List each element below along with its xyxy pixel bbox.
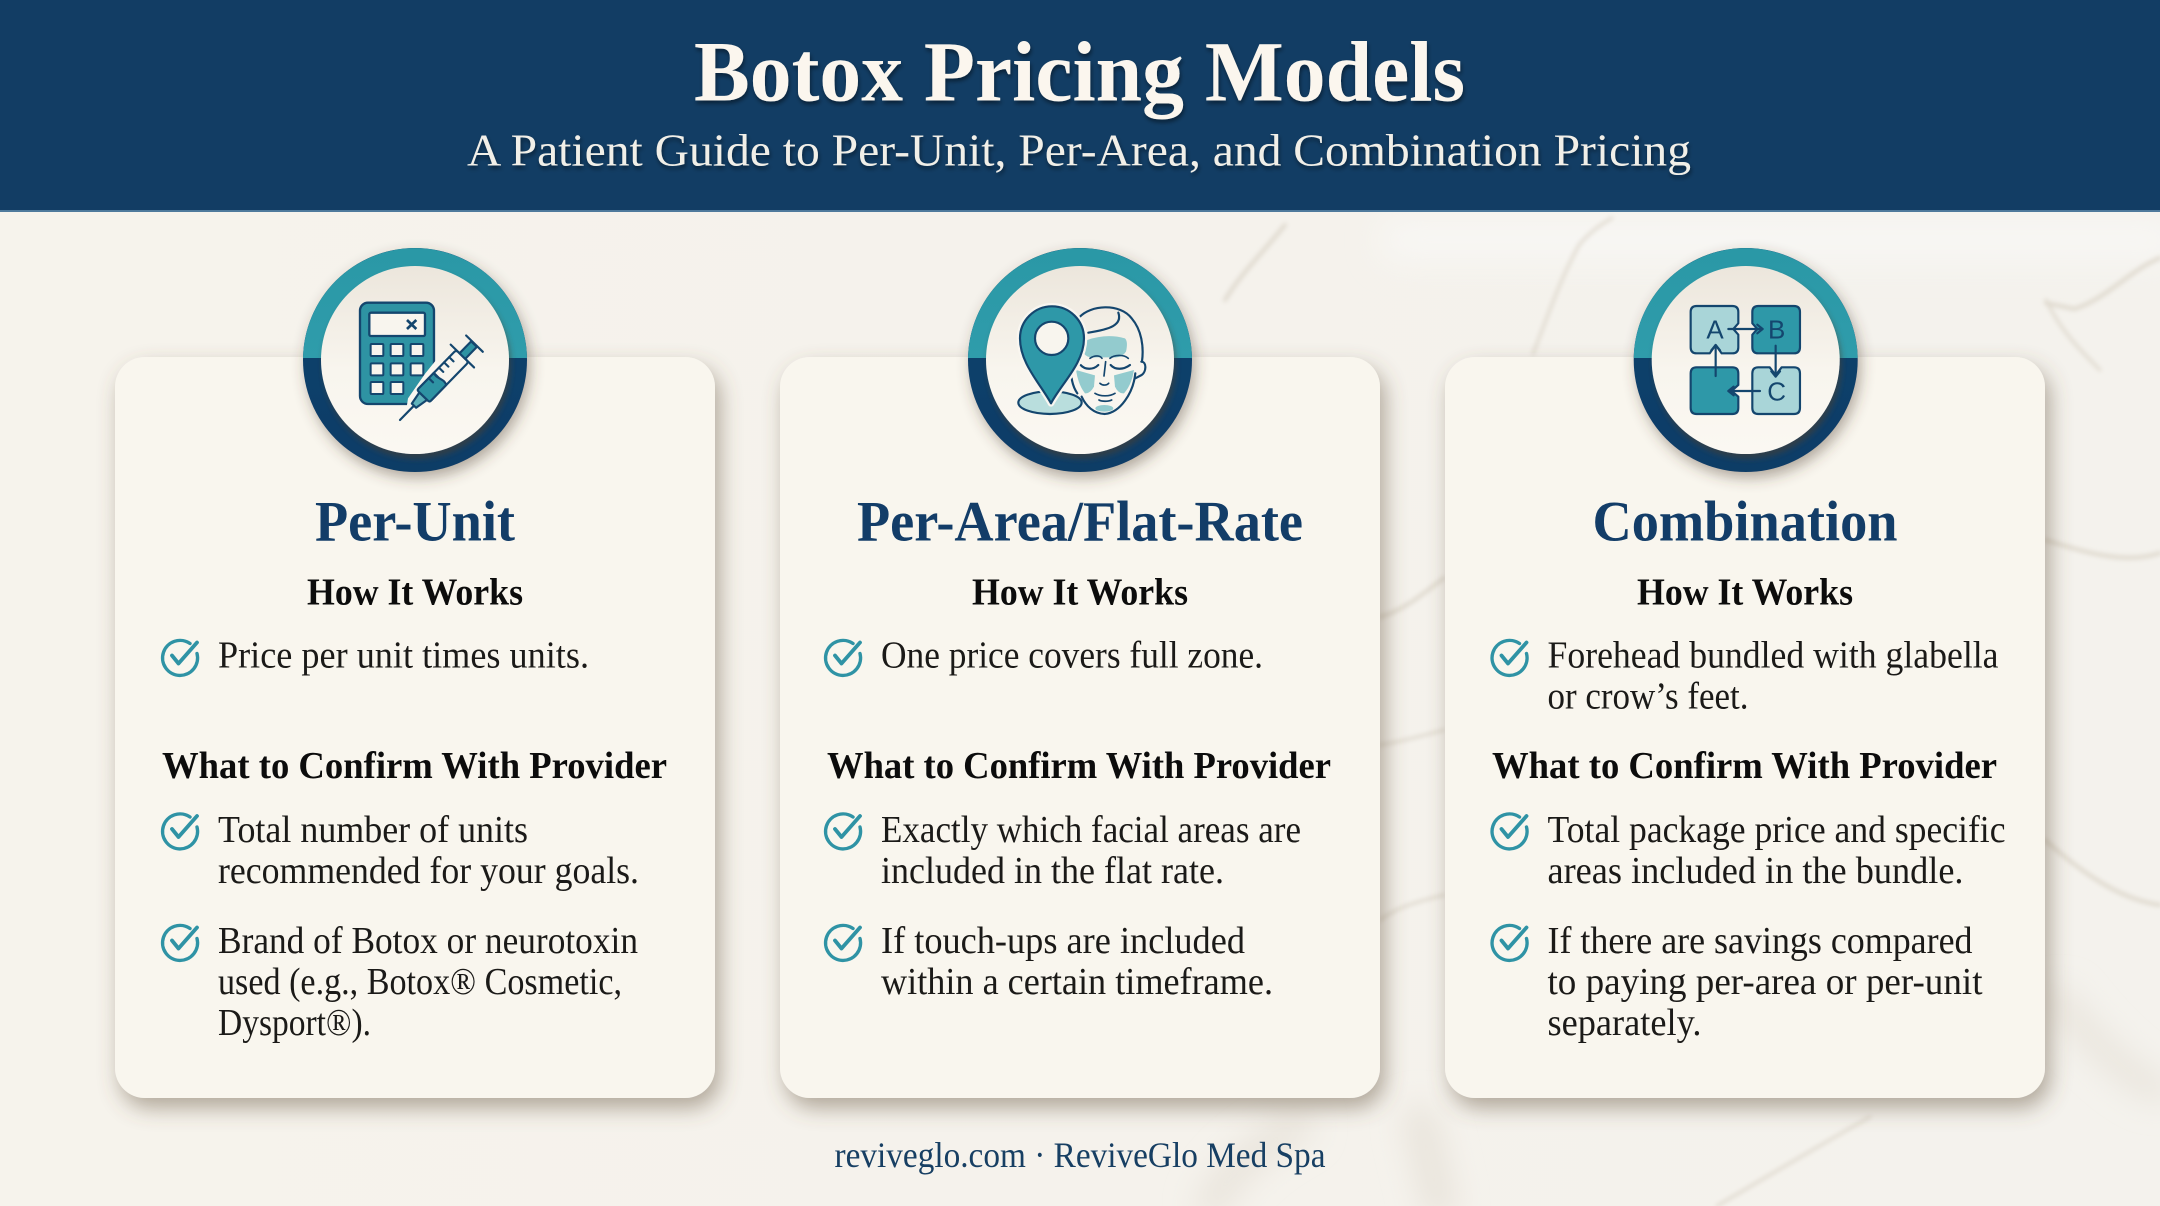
icon: map pin and face bbox=[1018, 306, 1145, 414]
title: Botox Pricing Models bbox=[694, 24, 1465, 120]
subtitle: A Patient Guide to Per-Unit, Per-Area, and Combination Pricing bbox=[467, 124, 1691, 176]
card background bbox=[780, 357, 1380, 1098]
how it works text: One price covers full zone. bbox=[881, 634, 1263, 676]
how it works text: Price per unit times units. bbox=[218, 634, 589, 676]
check icon bbox=[826, 925, 861, 960]
item: facial areas: Exactly which facial areas are bbox=[881, 809, 1301, 851]
item: facial areas bbox=[881, 809, 1301, 892]
item: touch-ups: If touch-ups are included bbox=[881, 920, 1245, 962]
item: brand: Dysport®). bbox=[218, 1002, 371, 1044]
confirm heading: What to Confirm With Provider bbox=[162, 745, 667, 787]
panel: per-area flat-rate bbox=[780, 248, 1380, 1098]
how it works heading: How It Works bbox=[307, 572, 523, 614]
item: brand: Brand of Botox or neurotoxin bbox=[218, 920, 638, 962]
item: savings bbox=[1548, 920, 1983, 1044]
item: total units: Total number of units bbox=[218, 809, 528, 851]
icon badge ring bbox=[1634, 248, 1858, 472]
icon: puzzle tiles A B C: A bbox=[1706, 314, 1724, 344]
item: package price: Total package price and specific bbox=[1548, 809, 2006, 851]
item: savings: to paying per-area or per-unit bbox=[1548, 961, 1983, 1003]
card background bbox=[115, 357, 715, 1098]
check icon bbox=[1492, 814, 1527, 849]
how it works text: or crow’s feet. bbox=[1548, 676, 1748, 718]
icon: calculator and syringe bbox=[360, 303, 486, 431]
confirm heading: What to Confirm With Provider bbox=[1492, 745, 1997, 787]
icon badge ring bbox=[303, 248, 527, 472]
item: package price: areas included in the bundle. bbox=[1548, 850, 1964, 892]
item: facial areas: included in the flat rate. bbox=[881, 850, 1224, 892]
card background bbox=[1445, 357, 2045, 1098]
icon: puzzle tiles A B C bbox=[1691, 306, 1800, 414]
card title: Per-Area/Flat-Rate bbox=[857, 490, 1303, 554]
check icon bbox=[826, 640, 861, 675]
item: brand: used (e.g., Botox® Cosmetic, bbox=[218, 961, 622, 1003]
item: package price bbox=[1548, 809, 2006, 892]
item: touch-ups: within a certain timeframe. bbox=[881, 961, 1273, 1003]
card title: Combination bbox=[1592, 490, 1898, 554]
item: touch-ups bbox=[881, 920, 1273, 1003]
check icon bbox=[826, 814, 861, 849]
item: total units: recommended for your goals. bbox=[218, 850, 639, 892]
icon: puzzle tiles A B C: B bbox=[1768, 314, 1785, 344]
item: savings: separately. bbox=[1548, 1002, 1702, 1044]
item: brand bbox=[218, 920, 638, 1044]
icon badge ring bbox=[968, 248, 1192, 472]
header band bbox=[0, 0, 2160, 212]
confirm heading: What to Confirm With Provider bbox=[827, 745, 1331, 787]
item: savings: If there are savings compared bbox=[1548, 920, 1972, 962]
card title: Per-Unit bbox=[315, 490, 515, 554]
icon: puzzle tiles A B C: C bbox=[1767, 376, 1786, 406]
panel: per-unit bbox=[115, 248, 715, 1098]
item: total units bbox=[218, 809, 639, 892]
check icon bbox=[1492, 640, 1527, 675]
footer: reviveglo.com · ReviveGlo Med Spa bbox=[834, 1135, 1326, 1175]
check icon bbox=[163, 925, 198, 960]
how it works heading: How It Works bbox=[1637, 572, 1853, 614]
panel: combination bbox=[1445, 248, 2045, 1098]
check icon bbox=[1492, 925, 1527, 960]
check icon bbox=[163, 640, 198, 675]
how it works text bbox=[1548, 634, 1999, 718]
check icon bbox=[163, 814, 198, 849]
how it works heading: How It Works bbox=[972, 572, 1188, 614]
how it works text: Forehead bundled with glabella bbox=[1548, 634, 1999, 676]
